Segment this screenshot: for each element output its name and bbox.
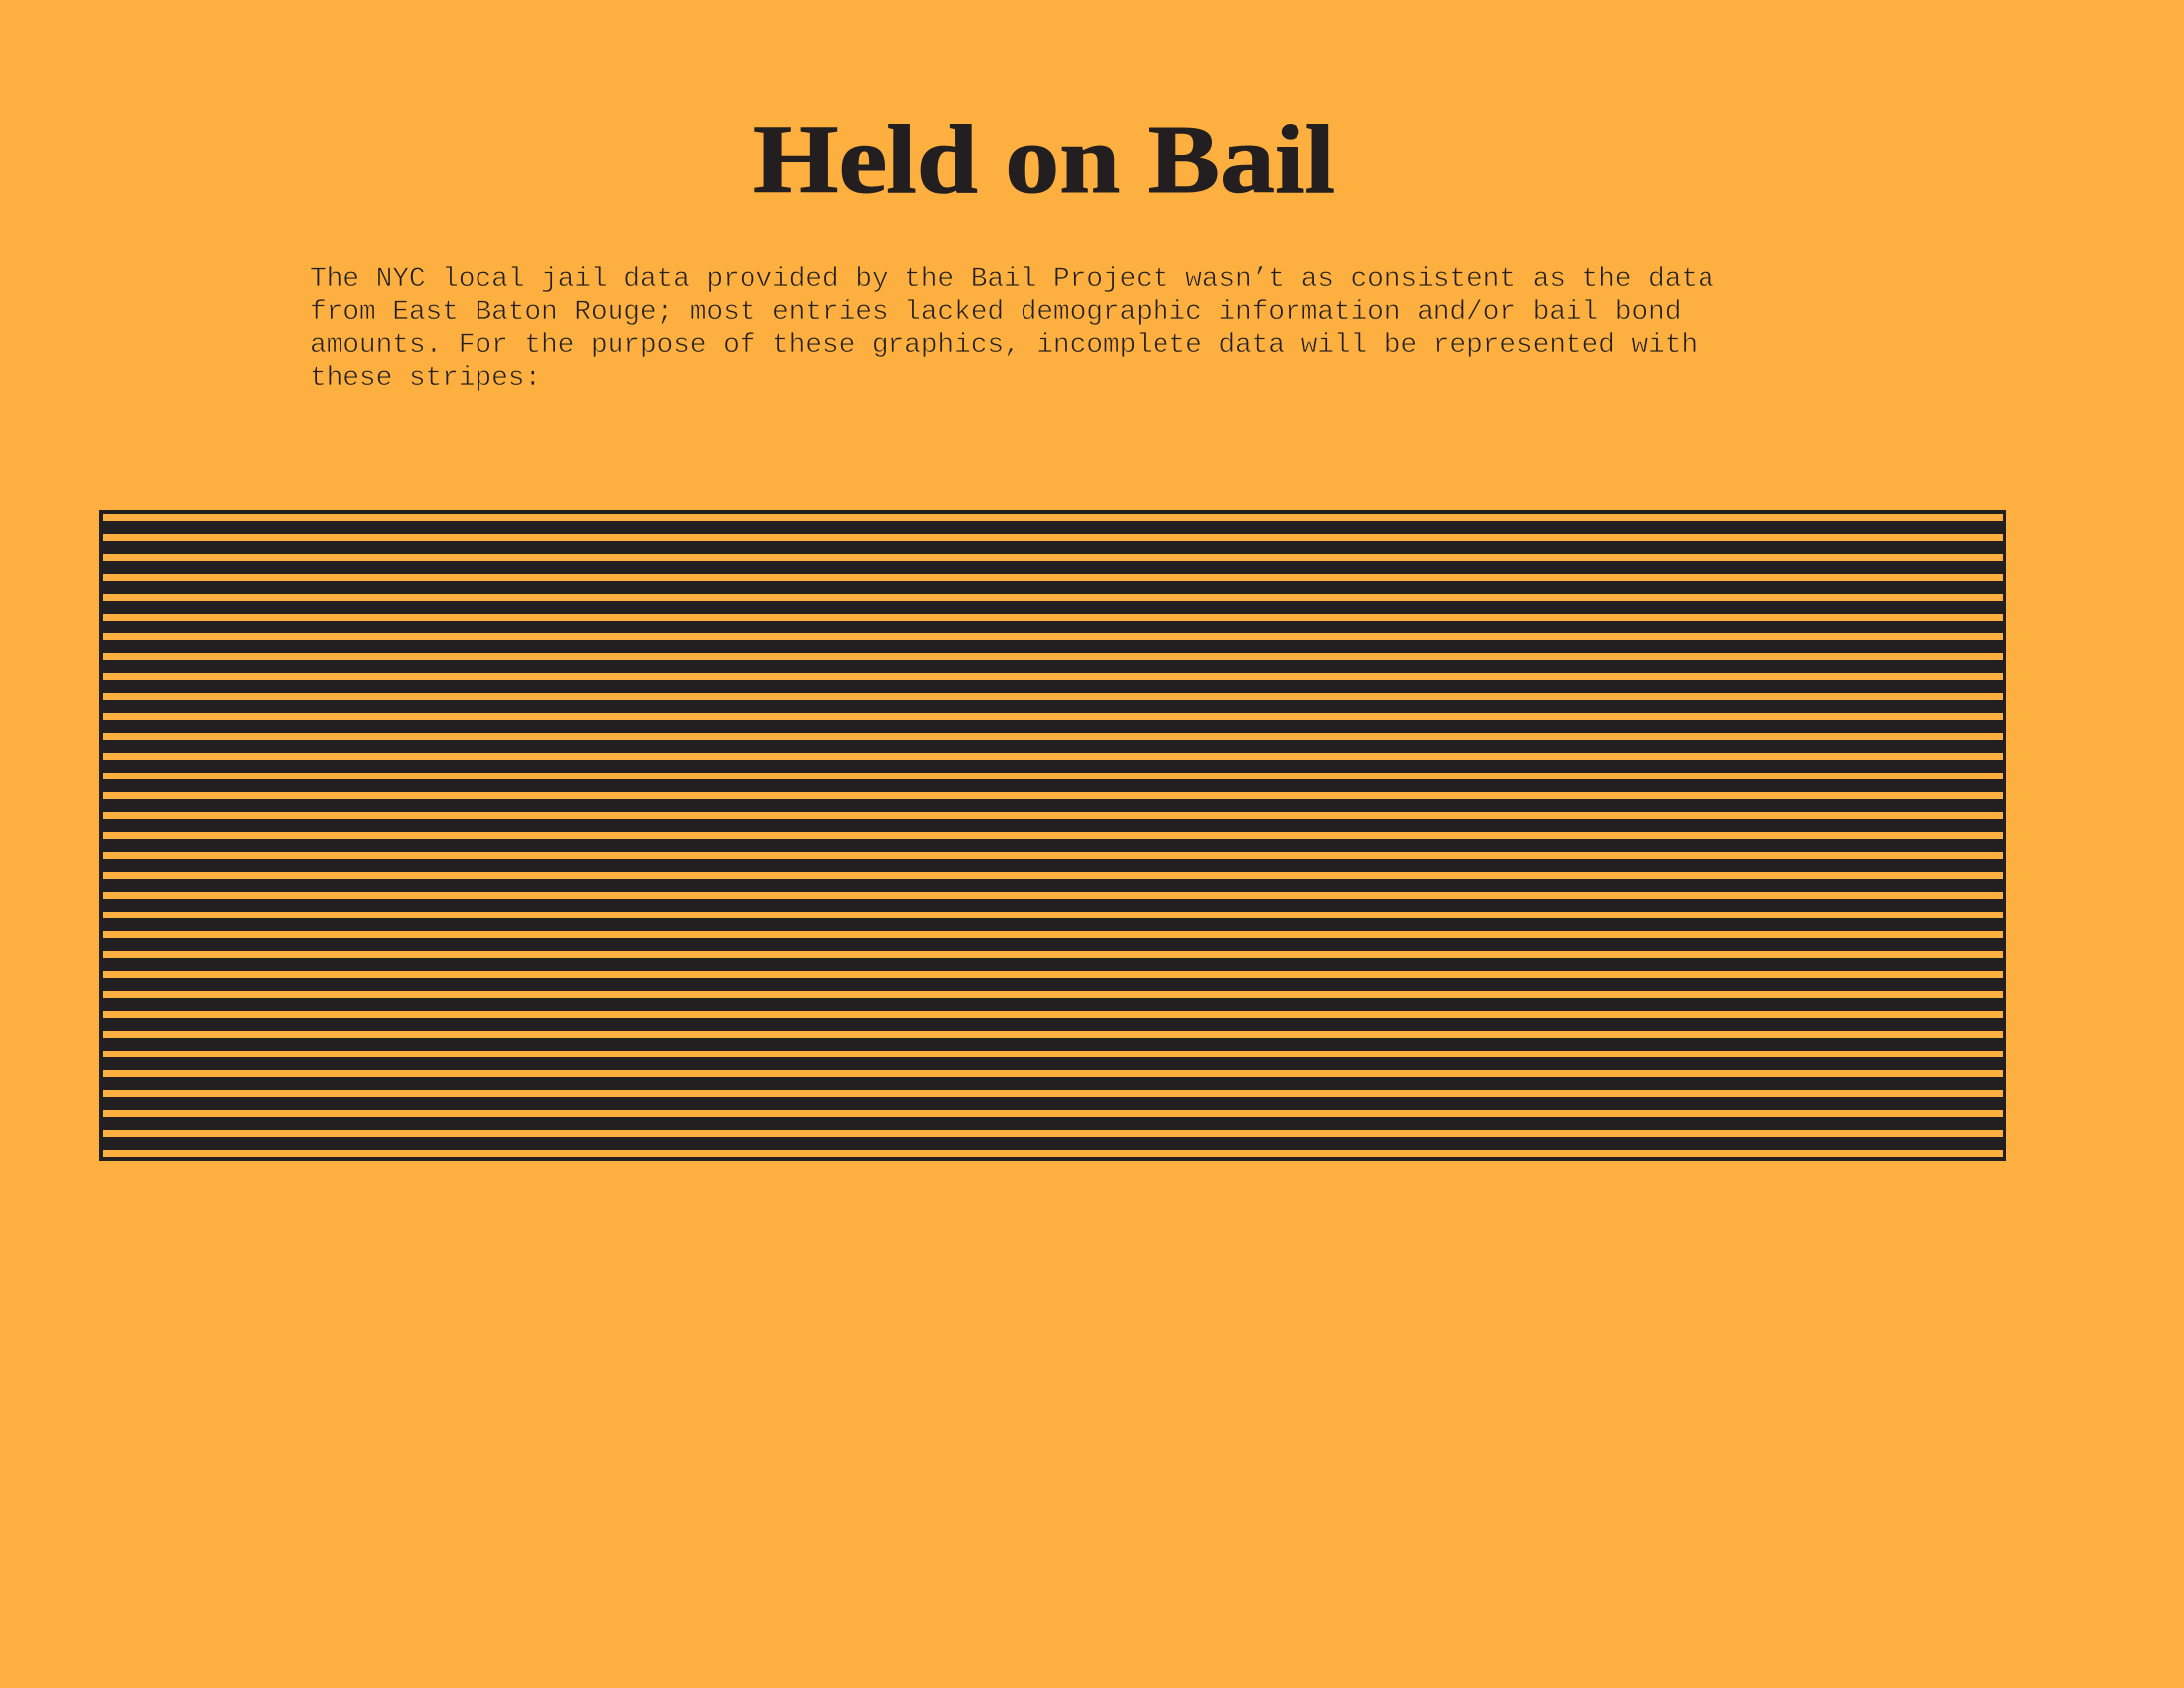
intro text block: amounts. For the purpose of these graphics, incomplete data will be represented with	[310, 330, 1698, 360]
striped incomplete-data legend panel	[99, 510, 2006, 1161]
intro text block: from East Baton Rouge; most entries lacked demographic information and/or bail bond	[310, 297, 1681, 328]
intro text block	[310, 264, 1714, 394]
intro text block: The NYC local jail data provided by the Bail Project wasn’t as consistent as the data	[310, 264, 1714, 295]
intro text block: these stripes:	[310, 363, 541, 394]
title: Held on Bail	[753, 106, 1335, 213]
